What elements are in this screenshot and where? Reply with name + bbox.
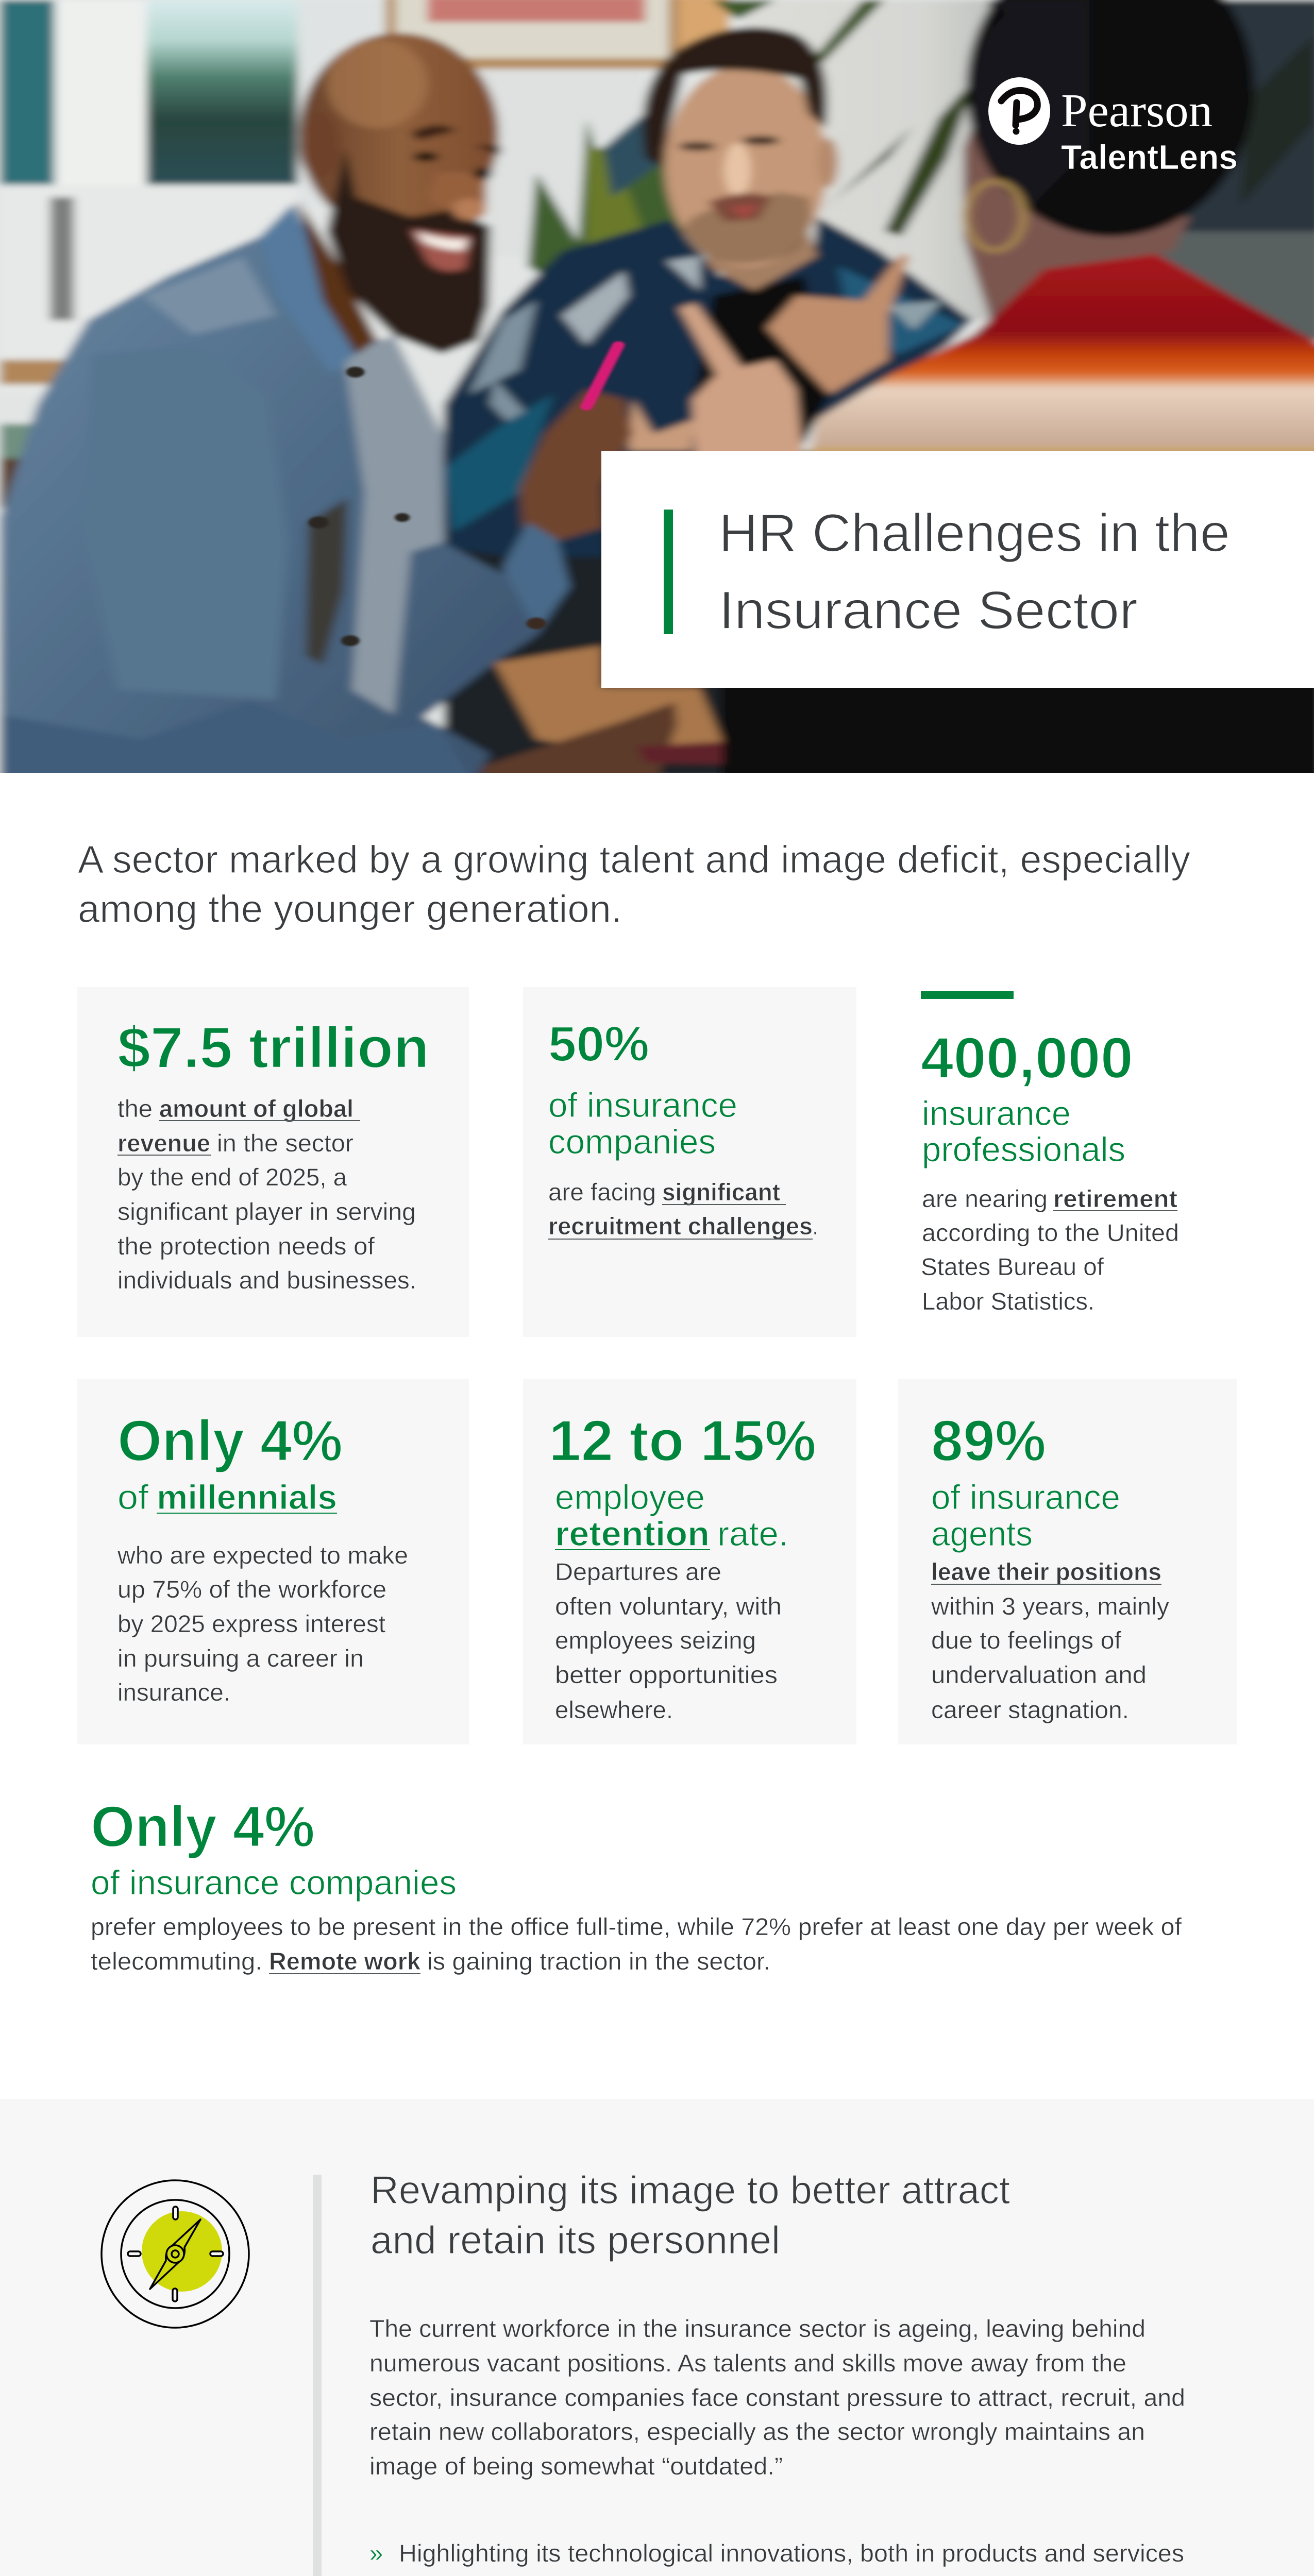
card subheading [548, 1086, 737, 1161]
card text [555, 1558, 782, 1723]
logo: Pearson TalentLens [988, 77, 1238, 177]
card text: career stagnation. [931, 1696, 1129, 1723]
stat card: 50%: 50% [548, 1016, 649, 1072]
stat: Only 4% of insurance companies: of insurance companies [91, 1863, 457, 1902]
body paragraph: numerous vacant positions. As talents and skills move away from the [369, 2349, 1126, 2377]
card subheading: retention [555, 1515, 710, 1553]
card text: better opportunities [555, 1661, 778, 1688]
card subheading: rate. [717, 1515, 788, 1553]
card text: undervaluation and [931, 1661, 1147, 1688]
stat card: $7.5 trillion [77, 987, 469, 1337]
card text [117, 1095, 416, 1294]
body paragraph: retain new collaborators, especially as the sector wrongly maintains an [369, 2418, 1145, 2445]
stat text: Labor Statistics. [922, 1287, 1094, 1315]
stat card: Only 4% of millennials: Only 4% [117, 1409, 343, 1473]
card text: . [813, 1212, 818, 1240]
body paragraph: sector, insurance companies face constant pressure to attract, recruit, and [369, 2384, 1185, 2411]
stat: 400,000: 400,000 [921, 1026, 1133, 1090]
bullet list: » [369, 2539, 383, 2567]
body paragraph: The current workforce in the insurance sector is ageing, leaving behind [369, 2315, 1145, 2342]
stat text: States Bureau of [921, 1253, 1104, 1280]
card text: in the sector [217, 1129, 353, 1157]
stat card: 12 to 15% [523, 1379, 856, 1744]
card text: within 3 years, mainly [931, 1592, 1170, 1620]
card text: significant [662, 1178, 780, 1206]
card text: often voluntary, with [555, 1592, 782, 1620]
stat subheading [922, 1094, 1125, 1169]
card text: are facing [548, 1178, 656, 1206]
card subheading: agents [931, 1515, 1033, 1553]
card subheading [931, 1478, 1120, 1553]
body paragraph: image of being somewhat “outdated.” [369, 2452, 783, 2480]
stat card: 89% [898, 1379, 1237, 1744]
card subheading: of [117, 1478, 148, 1517]
stat: Only 4% of insurance companies: Only 4% [91, 1794, 315, 1859]
section heading: and retain its personnel [370, 2218, 780, 2262]
card text: elsewhere. [555, 1696, 673, 1723]
card text: recruitment challenges [548, 1212, 813, 1240]
bullet list: Highlighting its technological innovations, both in products and services [399, 2539, 1184, 2567]
logo: Pearson TalentLens: Pearson [1061, 84, 1212, 137]
intro text: among the younger generation. [78, 887, 622, 930]
panel: revamping image [0, 2099, 1314, 2576]
card text: revenue [117, 1129, 210, 1157]
stat text: Remote work [269, 1947, 421, 1975]
card text: up 75% of the workforce [117, 1575, 386, 1603]
intro text [78, 838, 1190, 930]
card text [548, 1178, 818, 1240]
stat card: 89%: 89% [931, 1409, 1046, 1473]
section heading: Revamping its image to better attract [370, 2168, 1010, 2212]
card subheading: employee [555, 1478, 705, 1517]
icon: compass [102, 2180, 249, 2328]
stat text: are nearing [922, 1185, 1048, 1212]
card subheading [555, 1478, 788, 1553]
card text: the [117, 1095, 153, 1122]
stat text: is gaining traction in the sector. [427, 1947, 770, 1975]
card subheading: millennials [157, 1478, 337, 1517]
card subheading: of insurance [548, 1086, 737, 1125]
stat card: 50% [523, 987, 856, 1337]
icon: Pearson P mark [988, 77, 1050, 145]
card text: leave their positions [931, 1558, 1161, 1585]
card text: by 2025 express interest [117, 1610, 385, 1637]
card text: due to feelings of [931, 1626, 1122, 1654]
stat text: retirement [1053, 1185, 1177, 1212]
bullet list [369, 2539, 1192, 2576]
card text: who are expected to make [117, 1541, 408, 1569]
body paragraph [369, 2315, 1185, 2480]
card text: Departures are [555, 1558, 721, 1585]
hero photo: three colleagues in conversation [0, 0, 1314, 789]
logo: Pearson TalentLens: TalentLens [1061, 138, 1238, 177]
stat text: telecommuting. [91, 1947, 262, 1975]
section heading [370, 2168, 1010, 2262]
stat subheading: insurance [922, 1094, 1071, 1133]
intro text: A sector marked by a growing talent and image deficit, especially [78, 838, 1190, 881]
stat text: prefer employees to be present in the office full-time, while 72% prefer at least one day per week of [91, 1913, 1182, 1940]
stat text: according to the United [922, 1219, 1179, 1246]
card text: significant player in serving [117, 1198, 416, 1225]
stat subheading: professionals [922, 1130, 1125, 1169]
title text [719, 503, 1230, 640]
card text [117, 1541, 408, 1706]
title text: HR Challenges in the [719, 503, 1230, 563]
title text: Insurance Sector [719, 581, 1138, 640]
card text: insurance. [117, 1679, 230, 1706]
stat: 400,000 [921, 991, 1179, 1315]
card subheading: of insurance [931, 1478, 1120, 1517]
stat text [91, 1913, 1182, 1975]
card text: the protection needs of [117, 1232, 375, 1260]
card text [931, 1558, 1170, 1723]
stat: Only 4% of insurance companies [91, 1794, 1182, 1975]
stat card: Only 4% of millennials [77, 1379, 469, 1744]
card text: by the end of 2025, a [117, 1163, 347, 1191]
stat text [921, 1185, 1179, 1315]
card text: employees seizing [555, 1626, 756, 1654]
card subheading: companies [548, 1123, 716, 1161]
card text: in pursuing a career in [117, 1645, 364, 1672]
title panel [601, 451, 1314, 688]
stat card: 12 to 15%: 12 to 15% [549, 1409, 816, 1473]
stat card: $7.5 trillion: $7.5 trillion [117, 1015, 429, 1080]
card text: individuals and businesses. [117, 1266, 416, 1294]
card text: amount of global [159, 1095, 353, 1122]
